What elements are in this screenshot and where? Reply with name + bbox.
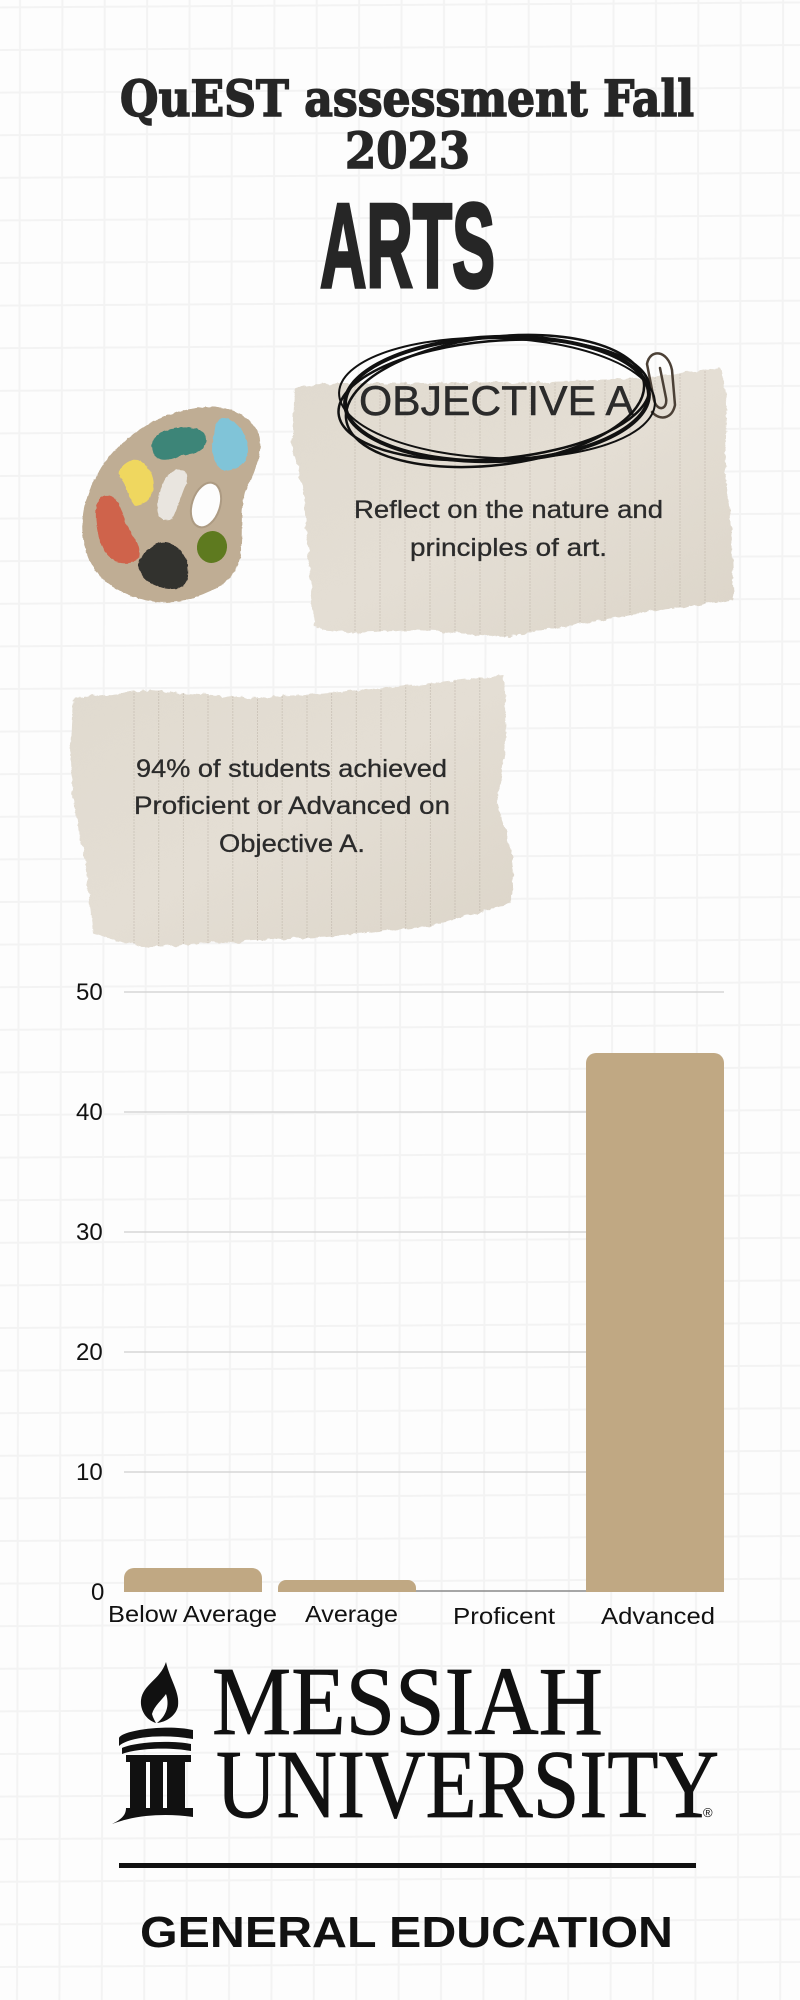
title xyxy=(120,69,694,180)
text: result summary: Objective A. xyxy=(219,830,365,858)
text: result summary: Proficient or Advanced on xyxy=(134,792,450,820)
footer: General Education: GENERAL EDUCATION xyxy=(140,1908,673,1957)
icon: paint palette xyxy=(82,407,260,602)
panel: result torn paper xyxy=(70,675,513,950)
y axis labels: 0 xyxy=(91,1579,104,1606)
bar: Average xyxy=(278,1580,416,1592)
title: QuEST assessment Fall xyxy=(120,69,694,128)
y axis labels: 10 xyxy=(76,1459,103,1486)
heading: OBJECTIVE A: OBJECTIVE A xyxy=(359,377,634,424)
x axis labels: Advanced xyxy=(601,1603,715,1629)
bar: Advanced xyxy=(586,1053,724,1592)
text: objective description: Reflect on the nature and xyxy=(354,496,663,524)
red paint xyxy=(96,496,140,563)
text: result summary xyxy=(134,755,450,858)
text: result summary: 94% of students achieved xyxy=(136,755,447,783)
divider rule xyxy=(119,1863,696,1868)
black paint xyxy=(138,542,188,589)
text: objective description xyxy=(354,496,663,562)
wordmark: UNIVERSITY: UNIVERSITY xyxy=(216,1731,719,1838)
y axis labels: 50 xyxy=(76,979,103,1006)
logo: Messiah University xyxy=(112,1648,719,1838)
palette hole xyxy=(186,479,226,531)
x axis labels: Average xyxy=(305,1601,398,1627)
icon: paper clip xyxy=(647,353,675,417)
x axis labels: Proficent xyxy=(453,1603,556,1629)
teal paint xyxy=(152,427,206,460)
heading: ARTS: ARTS xyxy=(320,179,495,313)
x axis labels: Below Average xyxy=(108,1601,277,1627)
y axis labels xyxy=(76,979,104,1606)
icon: torch and column xyxy=(112,1662,193,1824)
x axis labels xyxy=(108,1601,715,1629)
yellow paint xyxy=(119,460,153,506)
green paint xyxy=(193,528,231,566)
wordmark: MESSIAH: MESSIAH xyxy=(212,1648,603,1756)
scribbled circle around heading xyxy=(333,319,657,483)
panel: objective A torn paper xyxy=(292,365,734,640)
y axis labels: 40 xyxy=(76,1099,103,1126)
white paint xyxy=(157,470,187,520)
title: 2023 xyxy=(345,121,470,180)
light blue paint xyxy=(212,418,248,471)
y axis labels: 30 xyxy=(76,1219,103,1246)
y axis labels: 20 xyxy=(76,1339,103,1366)
bar chart xyxy=(76,979,724,1629)
bar: Below Average xyxy=(124,1568,262,1592)
registered mark: ® xyxy=(703,1805,713,1820)
text: objective description: principles of art. xyxy=(410,534,607,562)
